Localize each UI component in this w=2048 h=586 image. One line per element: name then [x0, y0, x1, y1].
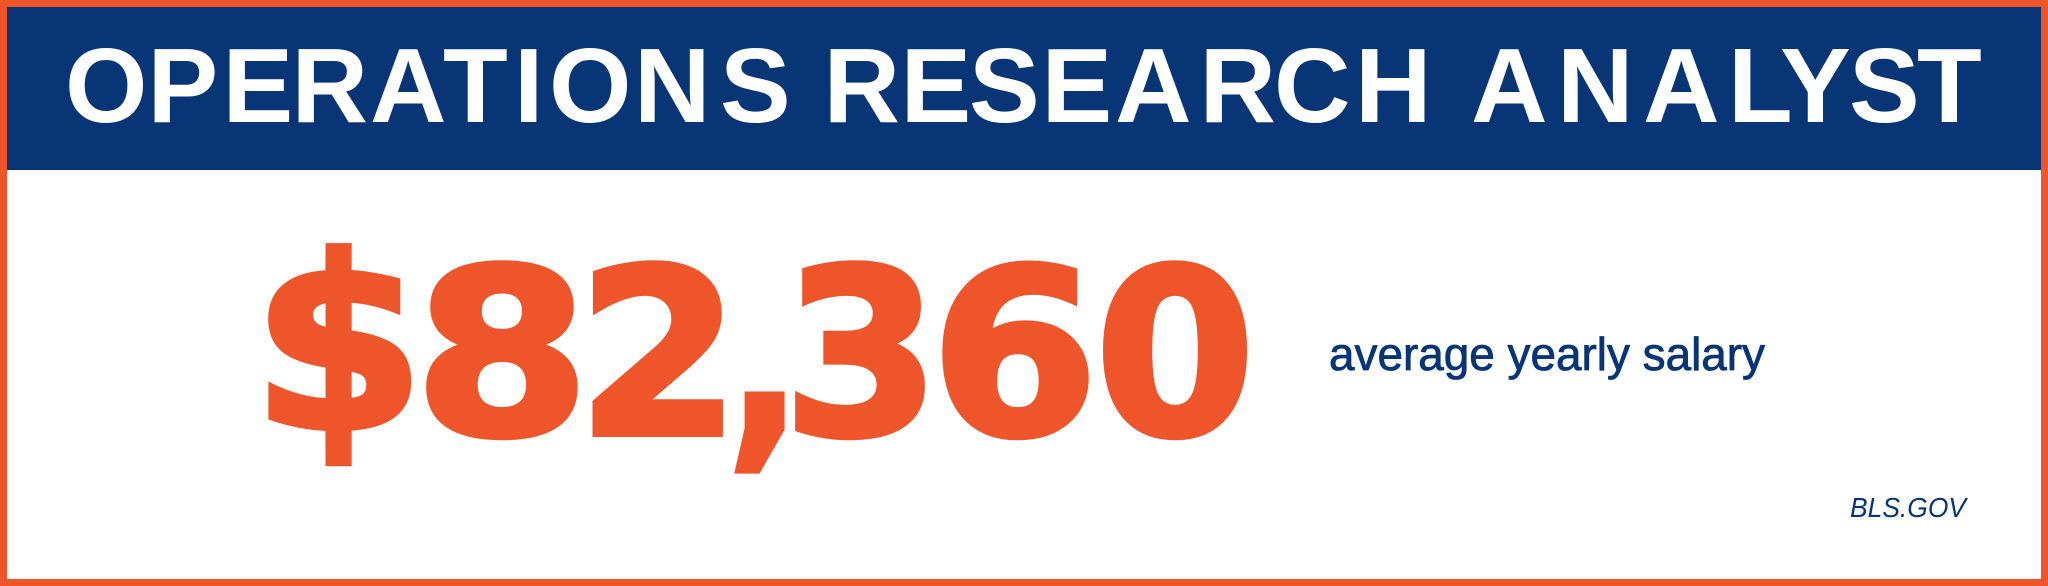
salary figure: 0	[1095, 222, 1255, 489]
salary figure: 3	[783, 221, 940, 489]
salary figure: 6	[930, 220, 1099, 489]
salary figure	[252, 206, 1255, 493]
panel: navy title band	[7, 7, 2041, 170]
salary figure: ,	[727, 225, 802, 493]
salary figure: 2	[577, 220, 740, 488]
salary caption: average yearly salary	[1329, 328, 1765, 380]
salary figure: 8	[414, 222, 590, 489]
salary figure: $	[252, 206, 425, 485]
source: BLS.GOV	[1850, 492, 1968, 523]
title: OPERATIONS RESEARCH ANALYST	[65, 27, 1982, 145]
